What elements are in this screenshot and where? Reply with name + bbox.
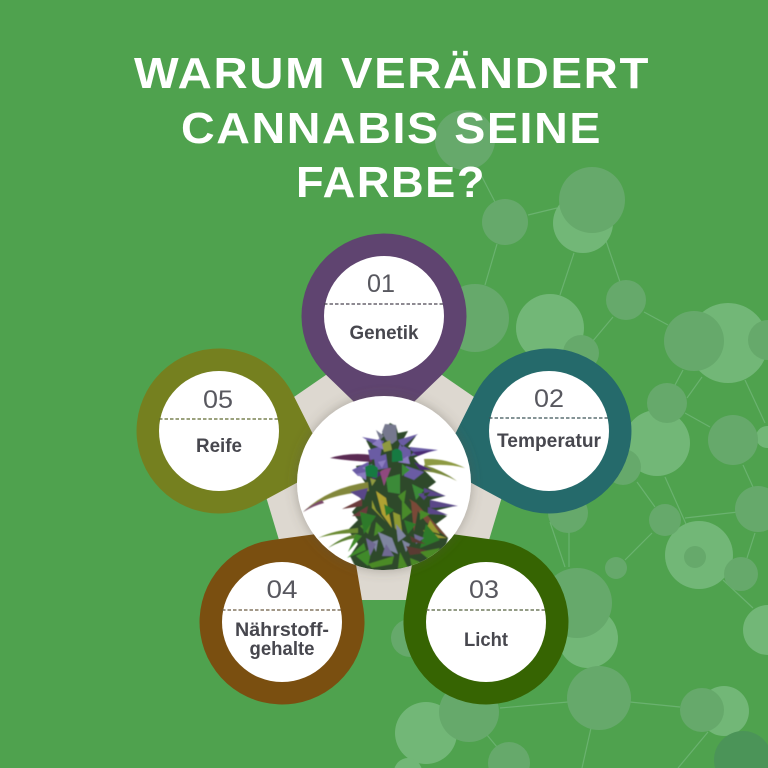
step 03: Licht xyxy=(351,480,601,737)
step 02: Temperatur: Temperatur xyxy=(497,431,602,452)
step 05: Reife: 05 xyxy=(203,386,233,414)
molecule network background xyxy=(391,110,768,768)
step 01: Genetik xyxy=(302,234,466,431)
step 01: Genetik: 01 xyxy=(367,270,395,298)
step 04: Nährstoffgehalte: gehalte xyxy=(250,639,314,660)
title: CANNABIS SEINE xyxy=(181,104,602,153)
central pentagon xyxy=(246,335,522,600)
step 05: Reife xyxy=(116,328,353,544)
step 05: Reife: Reife xyxy=(196,436,242,457)
title xyxy=(134,49,650,207)
step 04: Nährstoffgehalte xyxy=(167,480,417,737)
step 03: Licht: 03 xyxy=(469,576,499,604)
step 04: Nährstoffgehalte: 04 xyxy=(266,576,298,604)
step 03: Licht: Licht xyxy=(464,630,509,651)
title: WARUM VERÄNDERT xyxy=(134,49,650,98)
step 04: Nährstoffgehalte: Nährstoff- xyxy=(235,620,329,641)
icon: colourful cannabis flower xyxy=(303,423,465,572)
step 02: Temperatur: 02 xyxy=(534,385,564,413)
step 01: Genetik: Genetik xyxy=(350,323,419,344)
title: FARBE? xyxy=(296,158,486,207)
center circle xyxy=(297,396,471,570)
step 02: Temperatur xyxy=(415,328,652,544)
